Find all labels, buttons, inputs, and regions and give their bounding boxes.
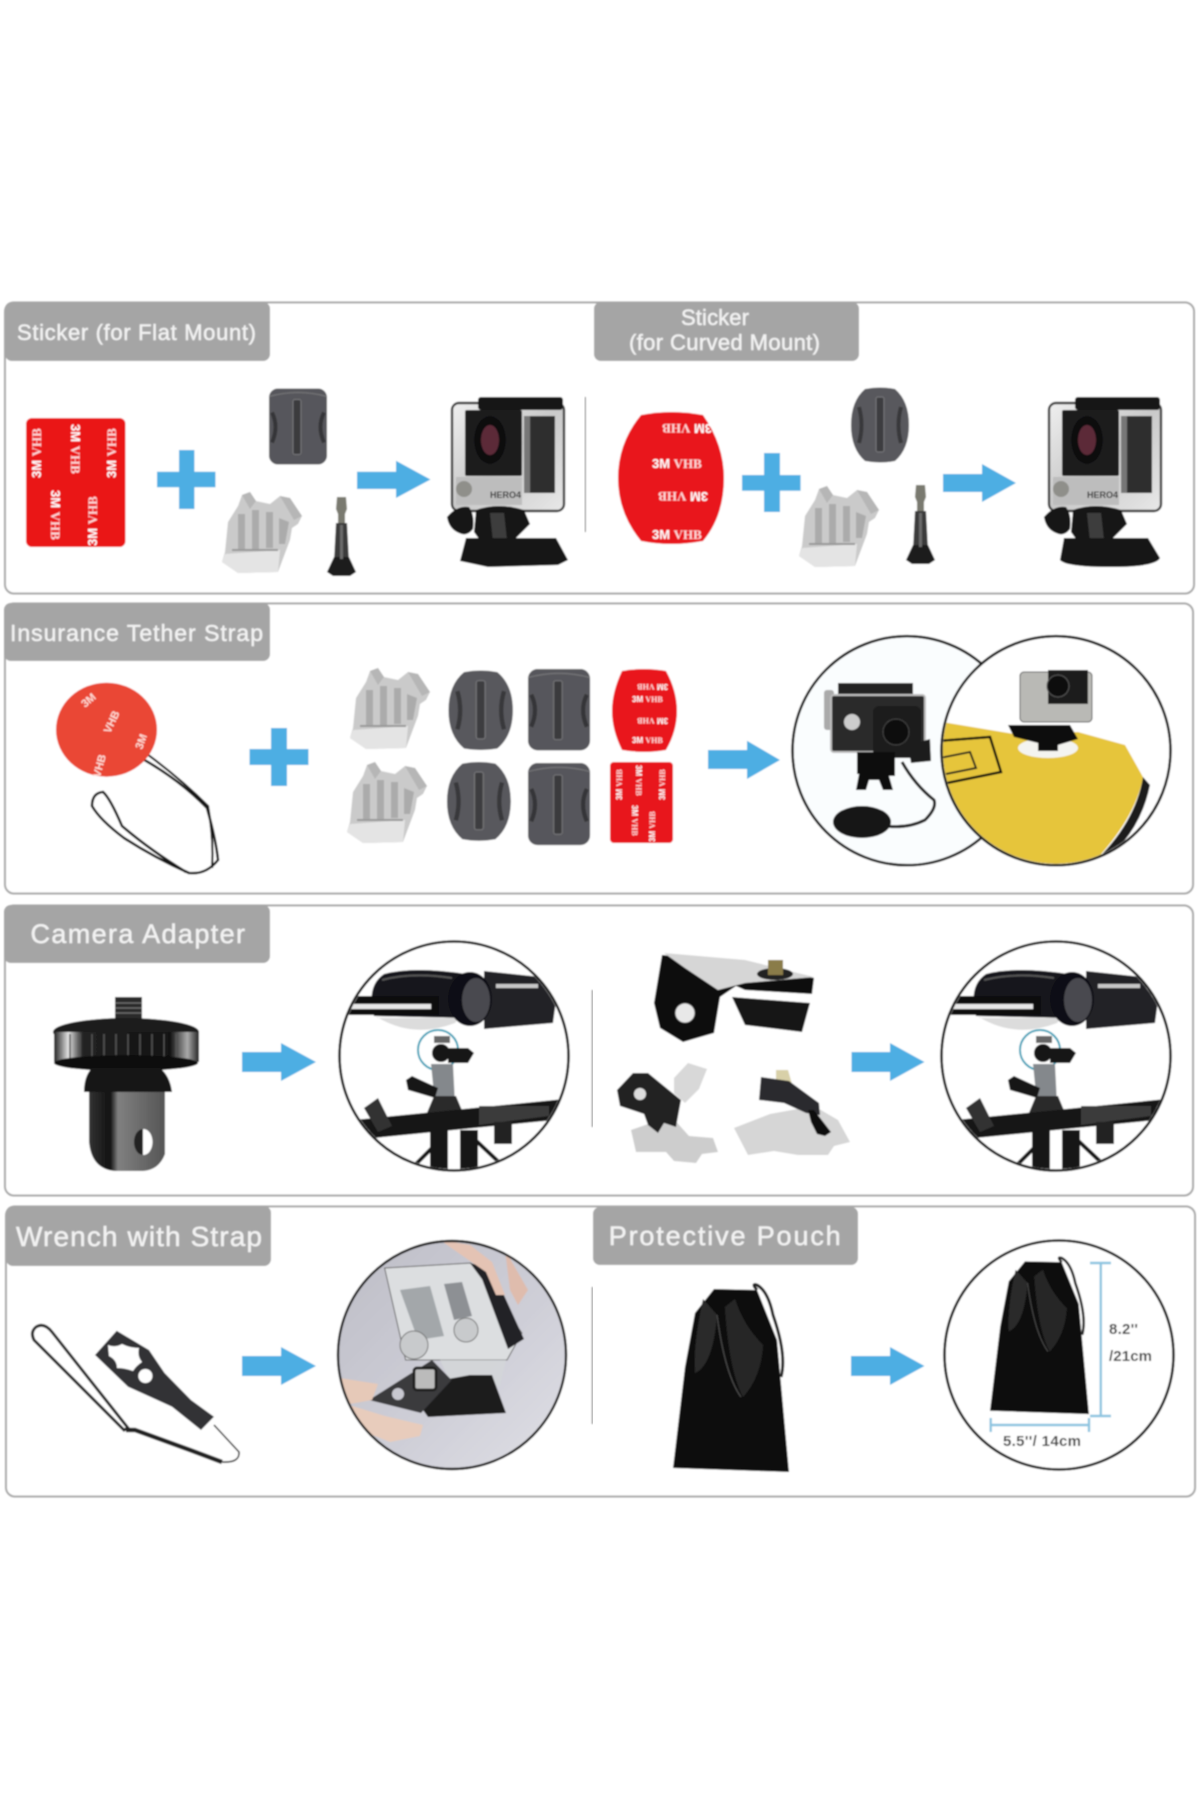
heading: Protective Pouch [593, 1207, 858, 1265]
heading: Sticker (for Curved Mount): (for Curved Mount) [629, 330, 820, 355]
icon: camera on curved mount: HERO4 [1087, 490, 1118, 500]
heading: Camera Adapter: Camera Adapter [30, 919, 245, 949]
icon: thumb screw [906, 485, 935, 564]
icon: buckle top [350, 668, 430, 749]
icon: mini tripod adapter [53, 997, 199, 1171]
heading: Protective Pouch: Protective Pouch [609, 1221, 841, 1251]
icon: curved mount top [448, 671, 513, 750]
icon: curved mount [851, 388, 909, 462]
heading: Wrench with Strap: Wrench with Strap [16, 1221, 262, 1252]
icon: flat red 3M sticker [26, 418, 126, 547]
heading: Sticker (for Curved Mount) [594, 302, 859, 361]
dimension: height marker [1090, 1263, 1111, 1416]
arrow [242, 1347, 316, 1385]
icon: small flat sticker: 3M VHB [648, 811, 657, 842]
icon: flat red 3M sticker: 3M VHB [104, 428, 119, 478]
icon: curved red 3M sticker: 3M VHB [652, 527, 702, 542]
icon: round adhesive disc with tether [56, 683, 218, 873]
arrow [357, 461, 430, 498]
icon: action camera tether circle [792, 636, 1022, 865]
icon: flat red 3M sticker: 3M VHB [85, 496, 100, 546]
icon: buckle [222, 492, 302, 573]
icon: flat red 3M sticker: 3M VHB [48, 490, 63, 540]
arrow [708, 741, 780, 779]
label: width: 5.5''/ 14cm [1003, 1433, 1081, 1450]
icon: round adhesive disc with tether: VHB [91, 753, 109, 779]
icon: pouch with dimensions circle [944, 1240, 1174, 1470]
heading: Wrench with Strap [6, 1206, 271, 1266]
heading: Sticker (for Curved Mount): Sticker [681, 305, 749, 330]
arrow [851, 1347, 924, 1385]
icon: round adhesive disc with tether: VHB [102, 709, 123, 735]
icon: curved red 3M sticker: 3M VHB [658, 489, 708, 504]
icon: small curved sticker: 3M VHB [637, 716, 668, 725]
icon: small flat sticker: 3M VHB [634, 765, 643, 796]
icon: small curved sticker: 3M VHB [637, 682, 668, 691]
icon: camcorder on bike circle [334, 942, 574, 1181]
icon: plus [742, 453, 801, 512]
heading: Camera Adapter [4, 905, 270, 963]
icon: small curved sticker: 3M VHB [632, 736, 663, 745]
icon: thumb screw [327, 497, 356, 576]
icon: flat mount [269, 388, 327, 464]
heading: Insurance Tether Strap [4, 603, 270, 661]
heading: Sticker (for Flat Mount) [5, 302, 270, 361]
dimension: width marker [991, 1418, 1089, 1432]
label: height: 8.2'' [1109, 1321, 1138, 1338]
icon: camcorder on bike circle 2 [936, 942, 1176, 1181]
panel: camera adapter [4, 905, 1193, 1196]
icon: flat red 3M sticker: 3M VHB [68, 424, 83, 474]
icon: camera on flat mount: HERO4 [490, 490, 521, 500]
icon: flat red 3M sticker: 3M VHB [29, 428, 44, 478]
arrow [852, 1043, 924, 1081]
icon: round adhesive disc with tether: 3M [79, 691, 99, 710]
icon: wrench tightening circle [338, 1240, 566, 1469]
icon: curved mount bottom [447, 762, 511, 841]
icon: sized pouch [990, 1258, 1089, 1414]
icon: small flat sticker: 3M VHB [615, 769, 624, 800]
panel: sticker mounts [5, 302, 1194, 594]
icon: flat mount top [528, 669, 590, 750]
label: height [1109, 1321, 1152, 1365]
icon: small curved sticker: 3M VHB [632, 695, 663, 704]
icon: buckle bottom [347, 762, 427, 843]
heading: Sticker (for Flat Mount): Sticker (for Flat Mount) [17, 320, 256, 345]
label: height: /21cm [1109, 1348, 1152, 1365]
heading: Insurance Tether Strap: Insurance Tether Strap [10, 620, 263, 646]
icon: small curved sticker [612, 669, 677, 752]
arrow [943, 464, 1016, 502]
divider lines [585, 397, 592, 1424]
icon: black drawstring pouch [673, 1285, 789, 1472]
icon: curved red 3M sticker [618, 412, 724, 544]
panel: wrench and pouch [6, 1206, 1195, 1496]
icon: flat mount bottom [528, 763, 590, 845]
icon: small flat sticker: 3M VHB [630, 805, 639, 836]
arrow [242, 1043, 316, 1081]
icon: plus [250, 728, 308, 786]
icon: curved red 3M sticker: 3M VHB [652, 456, 702, 471]
icon: plus [157, 450, 216, 509]
icon: small flat sticker [610, 762, 673, 843]
icon: folding adapter left [617, 1063, 718, 1163]
icon: small flat sticker: 3M VHB [658, 769, 667, 800]
icon: black tripod adapter [654, 953, 814, 1042]
panel: insurance tether strap [4, 603, 1193, 894]
icon: folding adapter right [734, 1070, 850, 1155]
icon: buckle [799, 486, 879, 567]
icon: camera on curved mount [1044, 397, 1161, 567]
icon: round adhesive disc with tether: 3M [134, 733, 150, 751]
icon: curved red 3M sticker: 3M VHB [662, 421, 712, 436]
icon: wrench with strap [32, 1325, 239, 1462]
icon: camera on flat mount [447, 397, 568, 567]
icon: camera on yellow board circle [930, 636, 1170, 880]
